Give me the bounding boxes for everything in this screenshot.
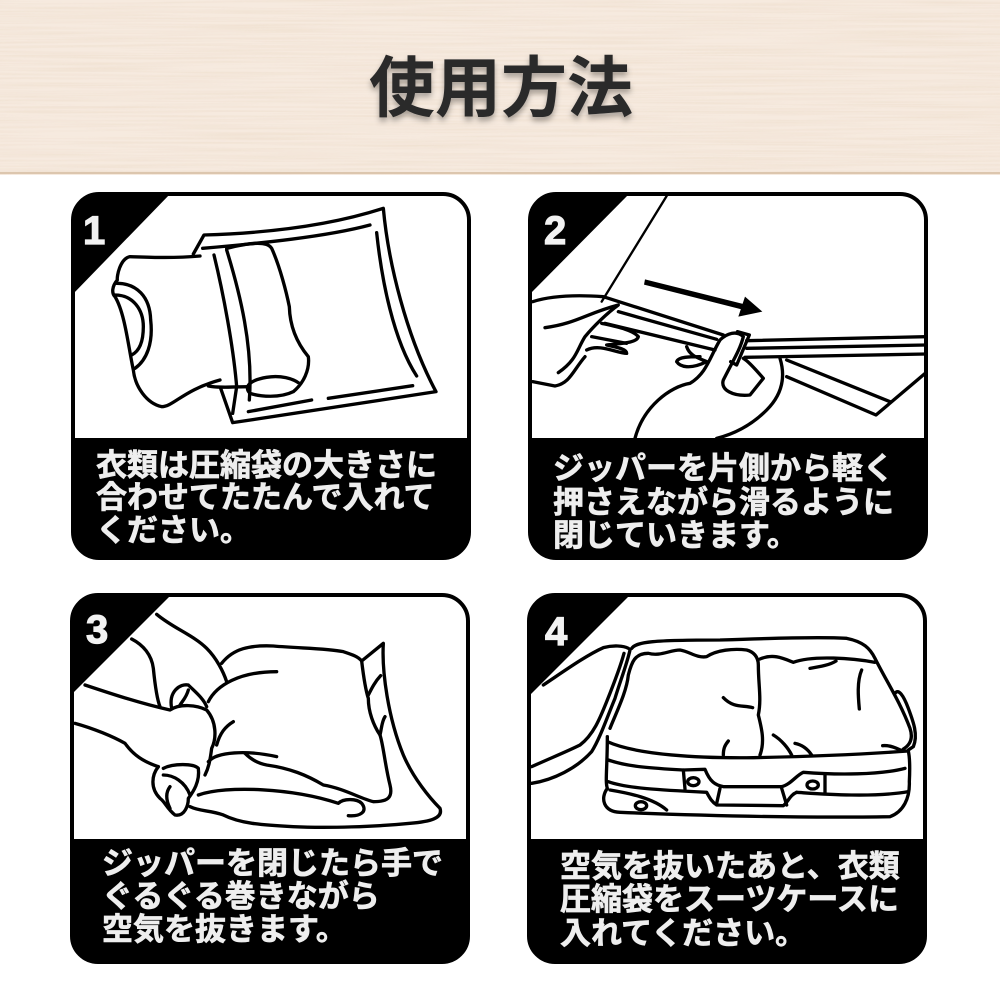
caption 1: 衣類は圧縮袋の大きさに	[96, 448, 437, 483]
number badge 3: 3	[86, 608, 108, 652]
caption 2: 閉じていきます。	[553, 518, 798, 553]
caption 4	[528, 839, 926, 963]
illustration: shirt going into bag	[113, 208, 436, 423]
illustration: hands closing zipper	[533, 196, 926, 438]
caption 2: ジッパーを片側から軽く	[553, 451, 894, 486]
number badge 1: 1	[83, 209, 105, 253]
number badge 3	[74, 597, 169, 692]
caption 4: 入れてください。	[560, 916, 806, 951]
caption 2: 押さえながら滑るように	[553, 485, 894, 520]
caption 3: 空気を抜きます。	[102, 912, 347, 947]
caption 1: 合わせてたたんで入れて	[96, 480, 435, 515]
panel: step 2	[529, 193, 927, 559]
arrow	[644, 279, 762, 317]
panel: step 1	[72, 193, 470, 559]
title: 使用方法	[369, 51, 633, 125]
caption 3: ジッパーを閉じたら手で	[102, 846, 443, 881]
caption 2	[529, 438, 927, 559]
caption 1: ください。	[96, 513, 251, 548]
caption 1	[72, 438, 470, 559]
panel: step 3	[71, 594, 469, 963]
number badge 2	[532, 196, 627, 292]
illustration: suitcase with bags	[532, 638, 915, 817]
illustration: rolling the bag	[75, 614, 441, 827]
caption 3: ぐるぐる巻きながら	[102, 879, 380, 914]
wood header background	[0, 0, 1000, 175]
caption 4: 空気を抜いたあと、衣類	[560, 849, 900, 884]
caption 3	[71, 839, 469, 963]
number badge 1	[75, 196, 168, 292]
number badge 4	[531, 597, 628, 694]
number badge 4: 4	[545, 610, 568, 654]
number badge 2: 2	[544, 209, 566, 253]
caption 4: 圧縮袋をスーツケースに	[560, 882, 899, 917]
panel: step 4	[528, 594, 926, 963]
